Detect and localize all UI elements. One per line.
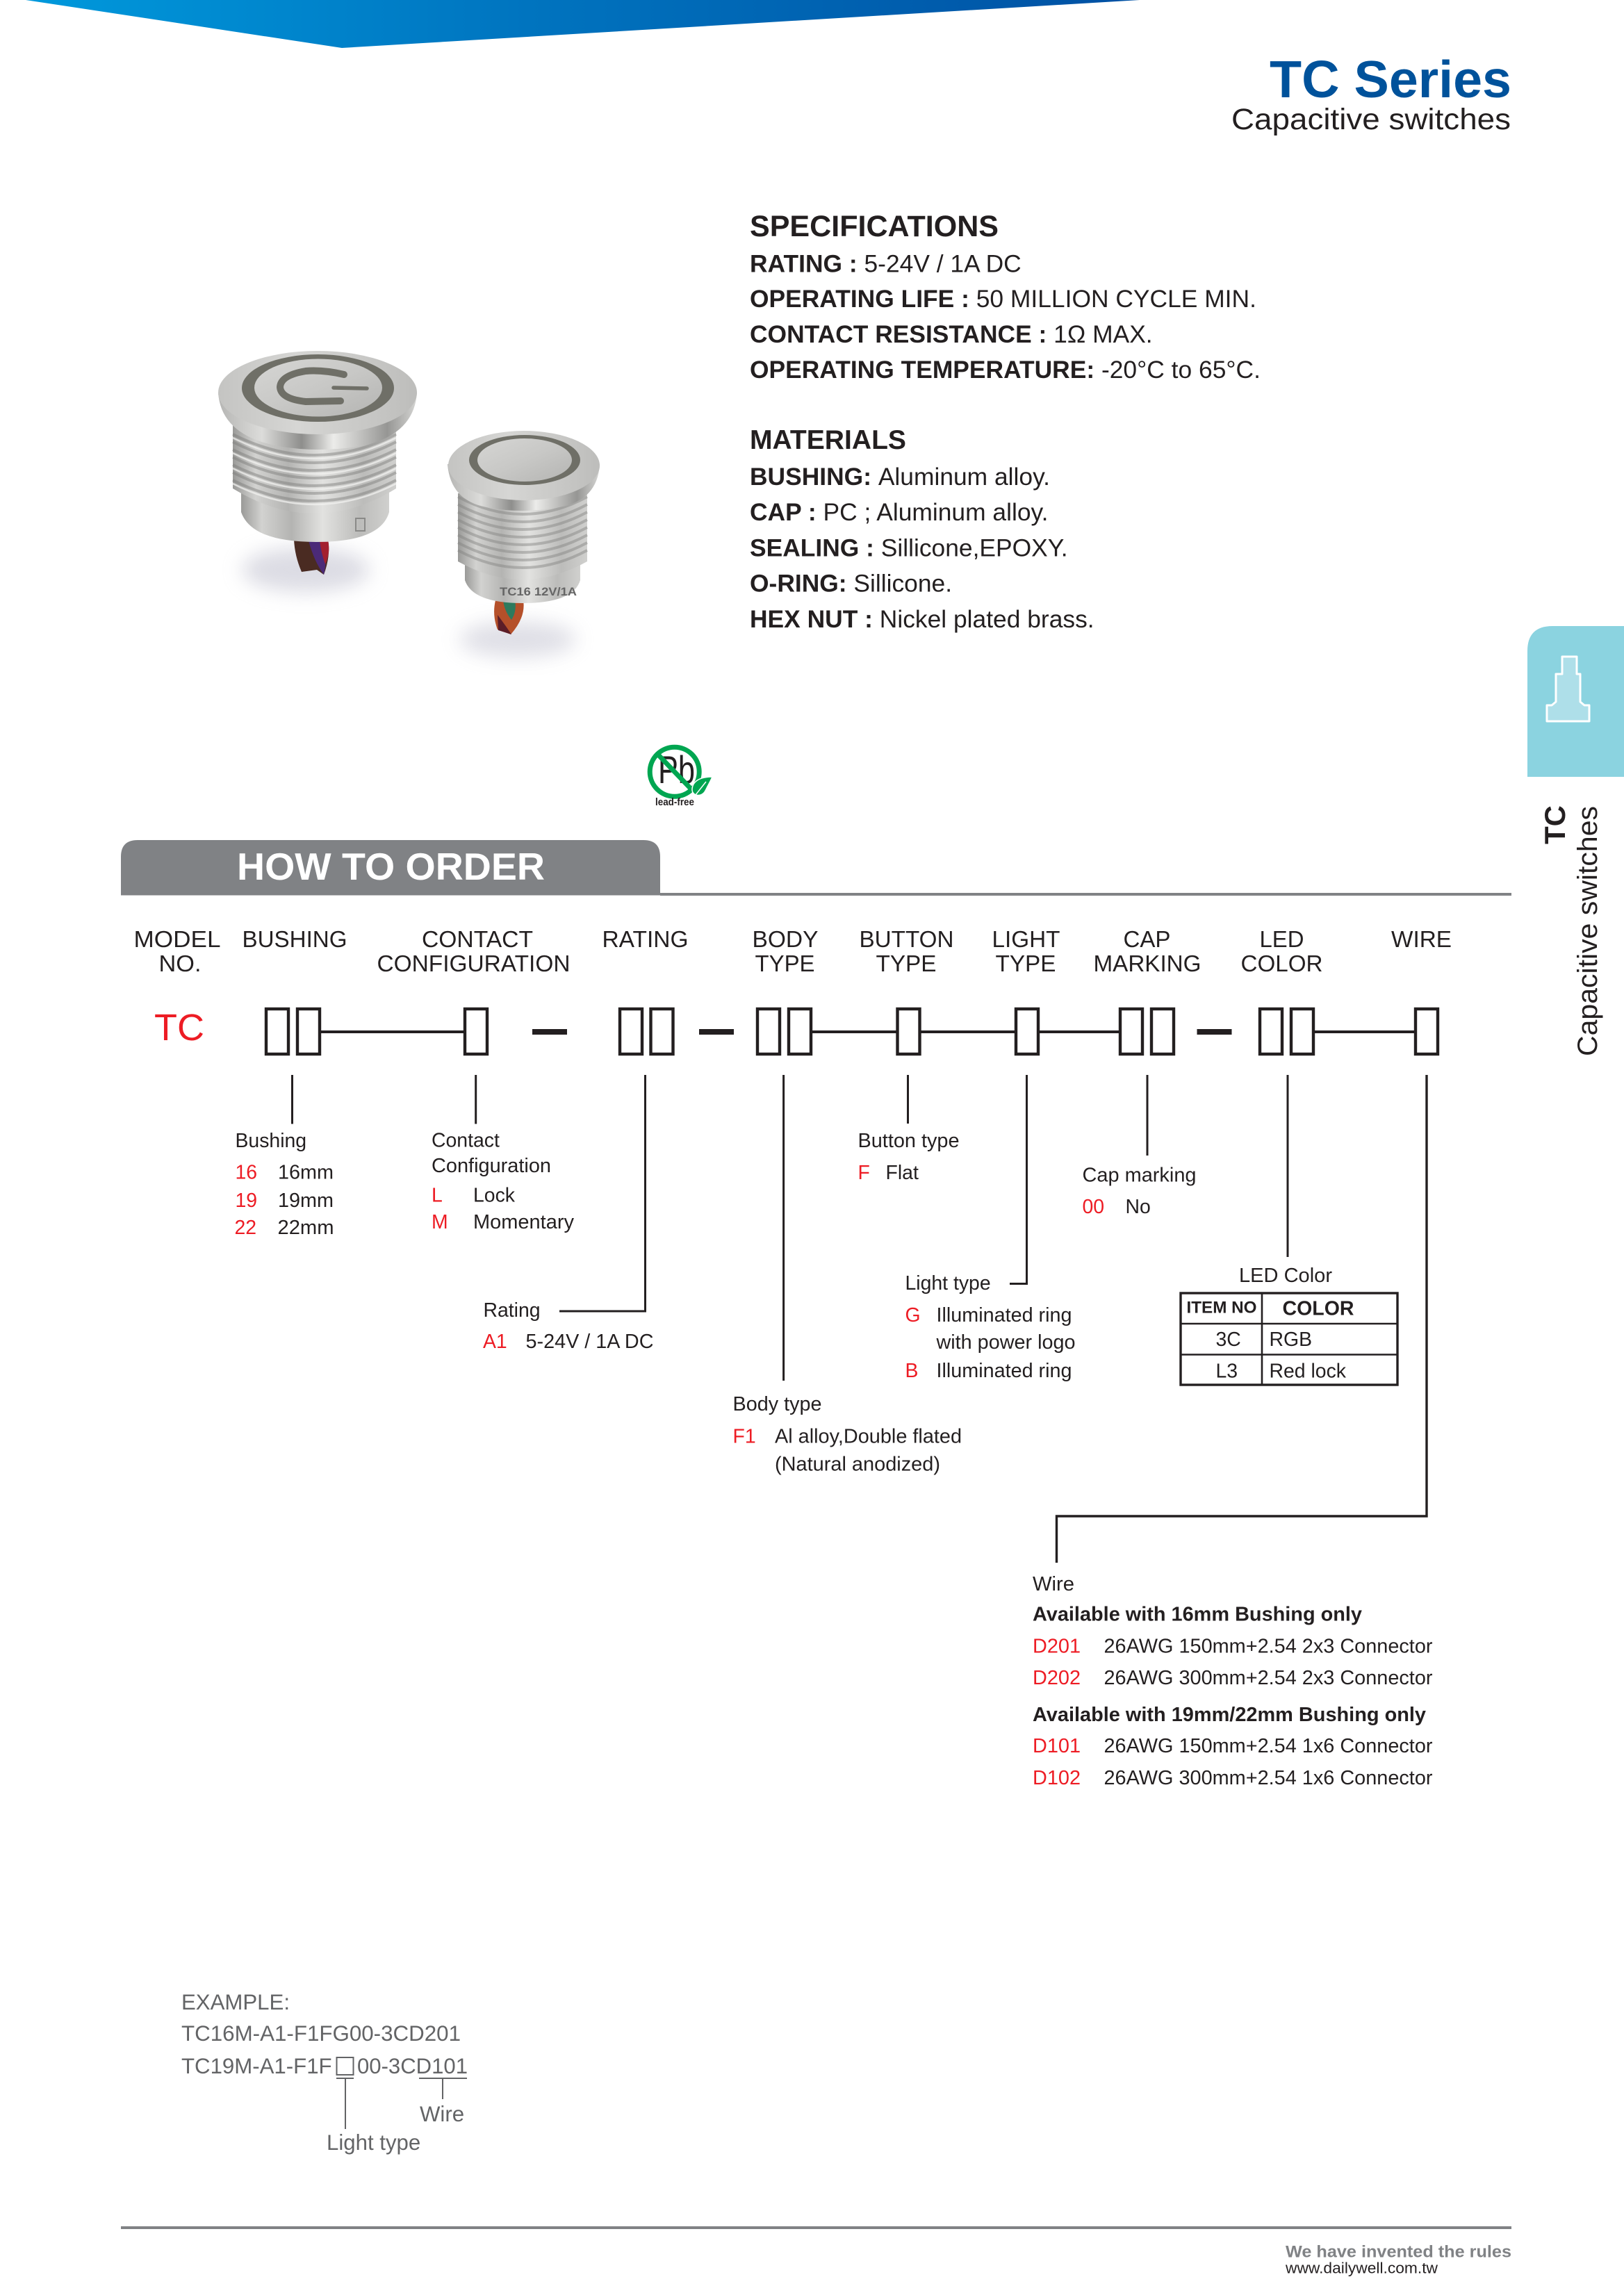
- legend: bushing: 19mm: [278, 1190, 334, 1212]
- icon: lead-free badge: Pb: [658, 748, 695, 791]
- header: bushing: BUSHING: [242, 926, 347, 952]
- side label: Capacitive switches: Capacitive switches: [1573, 806, 1603, 1056]
- header: rating: RATING: [602, 926, 688, 952]
- side tab with connector icon: [1527, 626, 1624, 777]
- legend: wire: 26AWG 150mm+2.54 1x6 Connector: [1104, 1735, 1433, 1757]
- header: model no: MODEL: [133, 926, 221, 952]
- spec: contact resistance: CONTACT RESISTANCE : 1Ω MAX.: [750, 320, 1153, 348]
- footer: We have invented the rules: [1286, 2243, 1511, 2261]
- legend: bushing: 19: [235, 1190, 257, 1212]
- legend: led color table: RGB: [1269, 1329, 1312, 1351]
- legend: light type: G: [905, 1304, 921, 1326]
- material: hex nut: HEX NUT : Nickel plated brass.: [750, 605, 1094, 633]
- legend: wire: D201: [1033, 1636, 1081, 1658]
- example block: TC19M-A1-F1F: [181, 2054, 332, 2078]
- small switch with plain ring: TC16 12V/1A: [500, 585, 577, 598]
- column headers: NO.: [158, 951, 202, 976]
- example block: TC16M-A1-F1FG00-3CD201: [181, 2021, 461, 2046]
- legend: cap marking: [1083, 1165, 1197, 1218]
- legend: led color table: L3: [1216, 1361, 1238, 1383]
- header: button type: BUTTON: [859, 926, 953, 952]
- legend: body type: Al alloy,Double flated: [775, 1426, 962, 1448]
- legend: button type: F: [858, 1162, 870, 1184]
- legend: bushing: 22: [235, 1217, 256, 1239]
- legend: light type: Light type: [905, 1272, 991, 1295]
- side label: TC: TC: [1539, 805, 1571, 844]
- material: o-ring: O-RING: Sillicone.: [750, 570, 952, 598]
- header: cap marking: CAP: [1123, 926, 1170, 952]
- legend: button type: [858, 1130, 959, 1184]
- header: wire: WIRE: [1391, 926, 1452, 952]
- title: TC Series: TC Series: [1270, 50, 1511, 108]
- legend: wire: [1033, 1573, 1433, 1789]
- example block: Light type: [327, 2130, 420, 2155]
- part-number code boxes: [266, 1009, 1438, 1054]
- legend: body type: Body type: [732, 1393, 821, 1415]
- material: bushing: BUSHING: Aluminum alloy.: [750, 463, 1050, 491]
- legend: contact configuration: [432, 1130, 575, 1233]
- legend: contact configuration: Contact: [432, 1130, 500, 1152]
- footer: www.dailywell.com.tw: [1285, 2260, 1438, 2276]
- how to order heading bar: HOW TO ORDER: [237, 845, 545, 888]
- legend: led color table: LED Color: [1239, 1265, 1332, 1287]
- legend: contact configuration: L: [432, 1184, 443, 1206]
- legend: led color table: Red lock: [1269, 1361, 1347, 1383]
- legend: wire: Available with 19mm/22mm Bushing only: [1033, 1704, 1426, 1726]
- legend: bushing: Bushing: [235, 1130, 306, 1152]
- footer: [121, 2226, 1511, 2276]
- legend: contact configuration: Configuration: [432, 1155, 551, 1177]
- column headers: TYPE: [995, 951, 1056, 976]
- column headers: MARKING: [1094, 951, 1201, 976]
- vertical side label: [1539, 805, 1603, 1056]
- legend: cap marking: No: [1126, 1196, 1151, 1218]
- heading: specifications: SPECIFICATIONS: [750, 211, 999, 243]
- how to order heading bar: [121, 840, 1511, 896]
- legend: light type: with power logo: [935, 1331, 1076, 1354]
- column headers: TYPE: [876, 951, 937, 976]
- example block: [181, 1990, 468, 2155]
- legend: wire: 26AWG 300mm+2.54 1x6 Connector: [1104, 1767, 1433, 1789]
- legend: body type: [732, 1393, 962, 1476]
- legend: wire: D202: [1033, 1667, 1081, 1689]
- leader lines: [292, 1075, 1427, 1563]
- column headers: TYPE: [755, 951, 814, 976]
- material: sealing: SEALING : Sillicone,EPOXY.: [750, 534, 1068, 561]
- spec: rating: RATING : 5-24V / 1A DC: [750, 250, 1022, 278]
- legend: button type: Flat: [885, 1162, 919, 1184]
- example block: 00-3CD101: [357, 2054, 468, 2078]
- legend: bushing: 16mm: [278, 1162, 334, 1184]
- example block: EXAMPLE:: [181, 1990, 290, 2014]
- legend: cap marking: 00: [1083, 1196, 1104, 1218]
- legend: light type: Illuminated ring: [937, 1360, 1072, 1382]
- icon: lead-free badge: lead-free: [655, 796, 694, 808]
- header: contact configuration: CONTACT: [422, 926, 533, 952]
- legend: led color table: 3C: [1216, 1329, 1241, 1351]
- legend: bushing: 22mm: [278, 1217, 334, 1239]
- large switch with power logo: [218, 351, 417, 592]
- legend: contact configuration: Momentary: [473, 1211, 575, 1233]
- example block: Wire: [420, 2102, 464, 2126]
- legend: wire: D101: [1033, 1735, 1081, 1757]
- header: body type: BODY: [752, 926, 819, 952]
- legend: wire: 26AWG 150mm+2.54 2x3 Connector: [1104, 1636, 1433, 1658]
- title block: [1231, 50, 1511, 136]
- legend: wire: Available with 16mm Bushing only: [1033, 1604, 1362, 1626]
- legend: contact configuration: Lock: [473, 1184, 516, 1206]
- icon: switch silhouette: [1547, 657, 1589, 721]
- product photo: two switches: [218, 351, 600, 657]
- column headers: [133, 926, 1452, 976]
- legend: rating: [483, 1299, 653, 1353]
- top banner: [26, 0, 1140, 48]
- legend: rating: Rating: [484, 1299, 541, 1322]
- header: light type: LIGHT: [992, 926, 1060, 952]
- heading: materials: MATERIALS: [750, 425, 906, 455]
- specifications: [750, 211, 1261, 384]
- spec: operating temperature: OPERATING TEMPERATURE: -20°C to 65°C.: [750, 356, 1261, 384]
- legend: light type: [905, 1272, 1076, 1382]
- legend: led color table: COLOR: [1283, 1298, 1354, 1320]
- material: cap: CAP : PC ; Aluminum alloy.: [750, 498, 1048, 526]
- model code TC: TC: [154, 1007, 204, 1049]
- legend: bushing: 16: [235, 1162, 257, 1184]
- spec: operating life: OPERATING LIFE : 50 MILLION CYCLE MIN.: [750, 285, 1256, 313]
- legend: bushing: [235, 1130, 334, 1239]
- subtitle: Capacitive switches: Capacitive switches: [1231, 103, 1511, 136]
- legend: led color table: ITEM NO: [1187, 1298, 1256, 1317]
- legend: cap marking: Cap marking: [1083, 1165, 1197, 1187]
- legend: light type: B: [905, 1360, 918, 1382]
- legend: wire: D102: [1033, 1767, 1081, 1789]
- header: led color: LED: [1259, 926, 1304, 952]
- legend: wire: Wire: [1033, 1573, 1074, 1595]
- legend: rating: 5-24V / 1A DC: [525, 1331, 653, 1353]
- legend: led color table: [1180, 1265, 1397, 1385]
- small switch with plain ring: [448, 431, 600, 657]
- legend: body type: F1: [732, 1426, 756, 1448]
- legend: button type: Button type: [858, 1130, 959, 1152]
- icon: lead-free badge: [650, 747, 712, 808]
- column headers: CONFIGURATION: [377, 951, 570, 976]
- legend: rating: A1: [483, 1331, 507, 1353]
- legend: contact configuration: M: [432, 1211, 448, 1233]
- column headers: COLOR: [1241, 951, 1323, 976]
- legend: light type: Illuminated ring: [937, 1304, 1072, 1326]
- legend: wire: 26AWG 300mm+2.54 2x3 Connector: [1104, 1667, 1433, 1689]
- legend: body type: (Natural anodized): [775, 1454, 940, 1476]
- materials: [750, 425, 1094, 633]
